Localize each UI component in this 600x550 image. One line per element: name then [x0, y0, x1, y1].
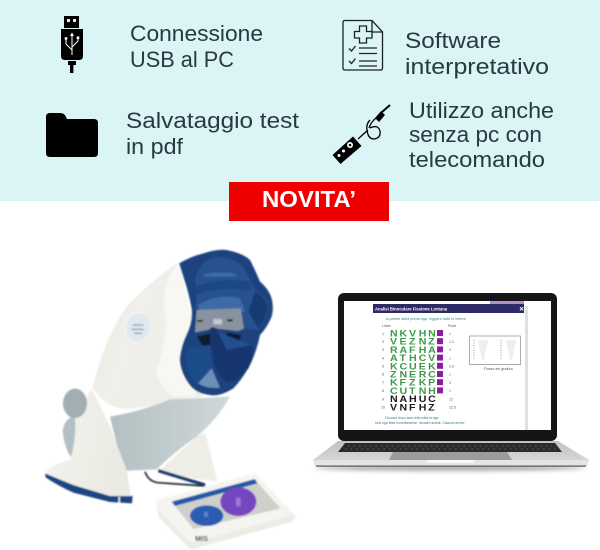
row and score numbers: 10 [381, 406, 385, 410]
footer notes: Una riga letta correttamente: cliccare avanti. Ciascun errore [375, 421, 465, 425]
icon: medical document checklist [343, 20, 382, 70]
pupil chart box: Flusso dei giudizio [484, 367, 513, 371]
footer notes [375, 416, 465, 425]
text: USB connection: USB al PC [130, 47, 234, 72]
cable [145, 472, 205, 486]
icon: usb connector [61, 16, 83, 73]
blue visor [179, 250, 273, 395]
tablet: remote control screen [156, 473, 295, 549]
stand right leg [160, 433, 217, 482]
grey side wing [63, 415, 77, 462]
row and score numbers: 1 [449, 372, 451, 376]
base blue stripe [45, 473, 133, 503]
row and score numbers: 1 [449, 356, 451, 360]
text: pdf test saving: Salvataggio test [126, 108, 300, 133]
text: use without pc via remote: senza pc con [409, 122, 542, 147]
row and score numbers: 9 [382, 398, 384, 402]
eye panel with sensors [195, 308, 244, 332]
row and score numbers: 12.5 [449, 406, 456, 410]
icon: folder [46, 113, 98, 157]
pupil chart box [470, 336, 520, 371]
text: pdf test saving: in pdf [126, 134, 184, 159]
row and score numbers: 8 [382, 389, 384, 393]
letter chart: VNFHZ [390, 403, 435, 413]
letter chart [390, 329, 437, 413]
row and score numbers: 1.2 [449, 340, 454, 344]
letter chart: RAFHA [390, 345, 437, 356]
device: perimeter with visor [45, 250, 273, 503]
letter chart: ZNERC [390, 370, 436, 380]
letter chart: KFZKP [390, 378, 435, 389]
laptop keyboard [338, 443, 562, 452]
instruction line: A partire dalla prima riga, leggere tutte le lettere [386, 317, 466, 321]
letter chart: NKVHN [390, 329, 436, 339]
row and score numbers: Punti [448, 324, 456, 328]
row and score numbers: 7 [382, 381, 384, 385]
row and score numbers: 1 [449, 389, 451, 393]
row and score numbers: 3 [449, 381, 451, 385]
laptop lid [338, 293, 557, 441]
letter chart: KCUEK [390, 362, 437, 372]
laptop shadow [315, 465, 585, 471]
letter chart: VEZNZ [390, 337, 435, 348]
knob [63, 389, 87, 418]
text: interpretive software: Software [405, 28, 501, 53]
row and score numbers: 5 [382, 364, 384, 368]
inner dark bands [195, 280, 252, 295]
tablet purple button [220, 487, 256, 516]
chin rest [210, 327, 253, 382]
body lighter collar [156, 261, 197, 397]
visor outer shell [179, 250, 273, 395]
text: use without pc via remote: telecomando [409, 147, 545, 172]
row and score numbers: 0.3 [449, 364, 454, 368]
window title bar: Analisi Binoculare Fissione Lontana [375, 306, 448, 312]
text: use without pc via remote: Utilizzo anche [409, 98, 554, 123]
lower chamber [186, 345, 220, 388]
badge: novita [229, 182, 389, 221]
text: interpretive software: interpretativo [405, 54, 549, 79]
text: pdf test saving [126, 108, 300, 159]
letter chart: NAHUC [390, 395, 436, 405]
stand left arm [45, 388, 131, 496]
tablet screen [172, 480, 281, 529]
text: USB connection: Connessione [130, 21, 263, 46]
row and score numbers: Linee [382, 324, 391, 328]
row and score numbers: 1 [449, 332, 451, 336]
laptop touchpad [389, 452, 512, 460]
laptop base [313, 441, 589, 466]
letter chart: ATHCV [390, 354, 435, 364]
tablet header bar [172, 479, 257, 506]
laptop screen [344, 301, 551, 430]
visor inner upper chamber [195, 257, 268, 330]
row and score numbers [381, 324, 456, 410]
window title bar [373, 304, 524, 313]
white body [93, 261, 203, 409]
row and score numbers: 3 [382, 348, 384, 352]
row and score numbers: 3 [449, 348, 451, 352]
test screen window [373, 301, 528, 430]
icon: remote control with cable [332, 105, 390, 164]
purple answer checks [437, 330, 443, 393]
text: use without pc via remote [409, 98, 554, 172]
badge: novita: NOVITA’ [262, 186, 356, 212]
window title bar: ✕ [519, 306, 524, 313]
laptop with test screen [313, 293, 589, 471]
row and score numbers: 12 [449, 398, 453, 402]
row and score numbers: 2 [382, 340, 384, 344]
tablet blue button [190, 505, 223, 526]
tablet: remote control screen: MIS [195, 534, 208, 543]
chin cups [197, 333, 211, 346]
panel: features background [0, 0, 600, 201]
row and score numbers: 4 [382, 356, 384, 360]
text: interpretive software [405, 28, 549, 79]
letter chart: CUTNH [390, 386, 436, 397]
row and score numbers: 1 [382, 332, 384, 336]
grey lower housing [110, 397, 230, 471]
logo disc [122, 309, 155, 346]
footer notes: Cliccare dopo aver letto tutta la riga [385, 416, 438, 420]
text: USB connection [130, 21, 263, 72]
row and score numbers: 6 [382, 372, 384, 376]
